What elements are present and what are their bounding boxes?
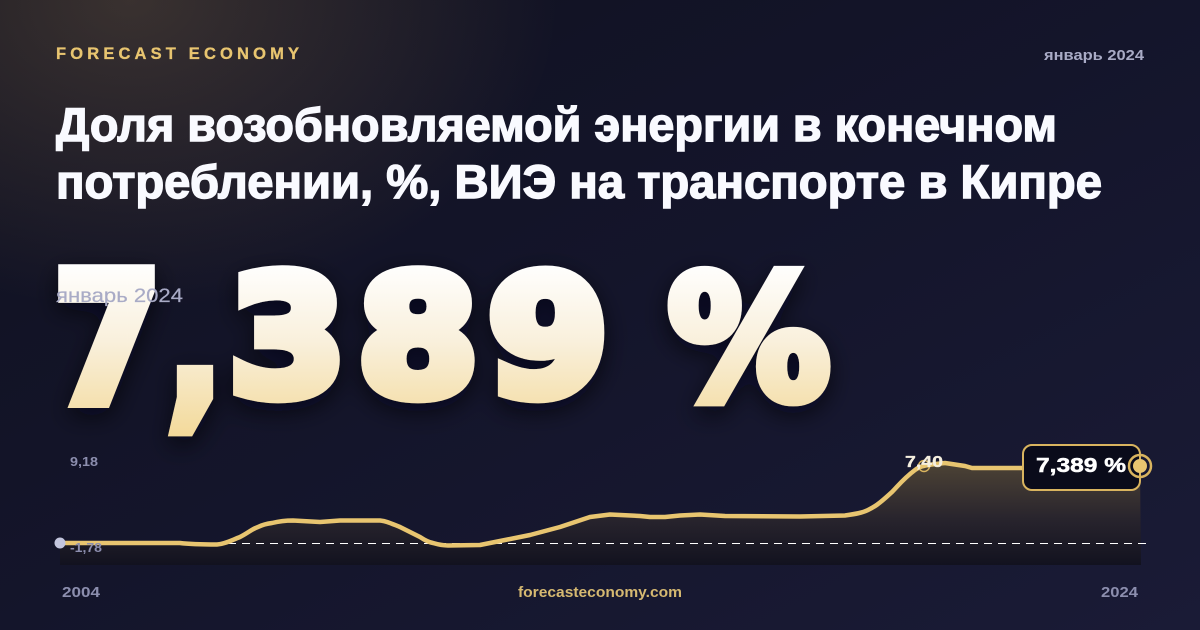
peak label: 7,40 <box>905 454 943 471</box>
chart area fill <box>60 463 1141 565</box>
value callout <box>1023 445 1140 490</box>
big value <box>54 232 830 449</box>
date top right: январь 2024 <box>1044 48 1144 64</box>
start marker <box>54 538 66 548</box>
baseline dashed <box>60 542 1146 544</box>
line chart <box>54 445 1151 565</box>
x axis end year: 2024 <box>1101 585 1138 601</box>
big value: 3 <box>229 242 346 433</box>
y min label: -1,78 <box>70 540 102 555</box>
big value: , <box>165 232 225 449</box>
brand label: FORECAST ECONOMY <box>56 45 299 63</box>
big value: 8 <box>358 242 478 433</box>
website: forecasteconomy.com <box>518 585 682 601</box>
title <box>56 98 1102 208</box>
end marker <box>1129 455 1151 477</box>
x axis start year: 2004 <box>62 585 100 601</box>
overlapping date under value: январь 2024 <box>56 285 183 307</box>
big value: % <box>668 241 830 439</box>
big value: 7 <box>54 236 161 443</box>
value callout: 7,389 % <box>1036 455 1126 477</box>
peak marker <box>918 460 930 472</box>
big value: 9 <box>488 242 608 433</box>
data line <box>60 463 1140 546</box>
title: Доля возобновляемой энергии в конечном <box>56 98 1057 151</box>
y max label: 9,18 <box>70 454 98 469</box>
title: потреблении, %, ВИЭ на транспорте в Кипре <box>56 155 1102 208</box>
